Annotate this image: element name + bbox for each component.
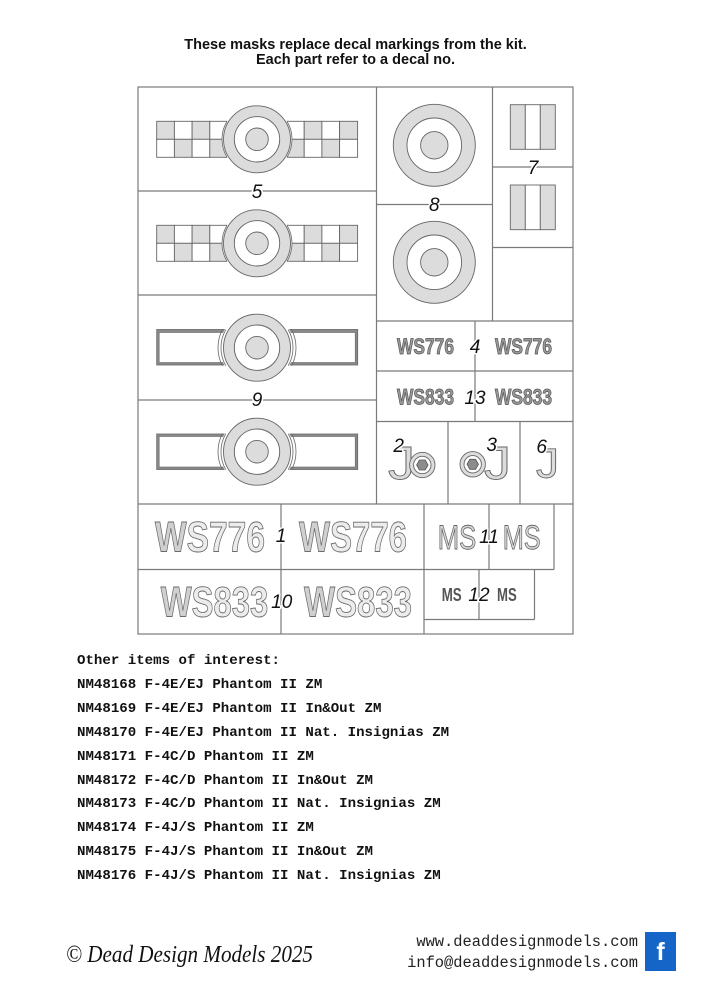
- handwritten part numbers: 9: [252, 390, 263, 411]
- large serials WS833: WS833: [161, 578, 268, 626]
- tail letter J with hex roundel: part 2: [388, 437, 435, 489]
- contact details: www.deaddesignmodels.com: [416, 933, 638, 951]
- tail letter J with hex roundel: part 3: [460, 437, 511, 489]
- large serials WS833: WS833: [304, 578, 412, 626]
- handwritten part numbers: 11: [479, 527, 499, 548]
- tail letter J with hex roundel: part 3: J: [484, 437, 511, 489]
- roundel with outlined bars: third: [157, 311, 358, 385]
- contact details: info@deaddesignmodels.com: [407, 954, 638, 972]
- text block: other items of interest: NM48175 F-4J/S Phantom II In&Out ZM: [77, 844, 373, 860]
- large code letters MS: MS: [438, 519, 476, 557]
- small serials WS833: WS833: [397, 384, 454, 410]
- handwritten part numbers: 12: [468, 585, 490, 606]
- text block: other items of interest: NM48171 F-4C/D Phantom II ZM: [77, 749, 314, 765]
- small serials WS776: WS776: [397, 334, 454, 359]
- handwritten part numbers: 1: [276, 526, 286, 547]
- handwritten part numbers: [252, 158, 547, 613]
- small code letters MS: MS: [442, 585, 462, 605]
- text block: other items of interest: NM48170 F-4E/EJ Phantom II Nat. Insignias ZM: [77, 725, 449, 741]
- heading: mask instructions: Each part refer to a decal no.: [256, 52, 455, 68]
- large code letters MS: MS: [503, 519, 541, 557]
- large serials WS776: [155, 514, 407, 562]
- large roundel: top: [393, 104, 475, 186]
- roundel with outlined bars: fourth: [157, 415, 358, 489]
- text block: other items of interest: NM48173 F-4C/D Phantom II Nat. Insignias ZM: [77, 796, 441, 812]
- handwritten part numbers: 13: [464, 388, 486, 409]
- large serials WS776: WS776: [299, 514, 407, 562]
- small code letters MS: [442, 585, 517, 605]
- handwritten part numbers: 2: [392, 436, 404, 457]
- text block: other items of interest: [77, 653, 449, 884]
- tricolour flash: top: [510, 105, 555, 149]
- tail letter J with hex roundel: part 2: J: [388, 437, 415, 489]
- handwritten part numbers: 4: [470, 337, 480, 358]
- roundel with checkerboard bars: top: [157, 104, 358, 174]
- panel: mask sheet grid: [138, 87, 573, 634]
- text block: other items of interest: NM48169 F-4E/EJ Phantom II In&Out ZM: [77, 701, 381, 717]
- large serials WS833: [161, 578, 412, 626]
- text block: other items of interest: NM48176 F-4J/S Phantom II Nat. Insignias ZM: [77, 868, 441, 884]
- text block: other items of interest: Other items of interest:: [77, 653, 280, 669]
- handwritten part numbers: 6: [536, 437, 547, 458]
- large serials WS776: WS776: [155, 514, 265, 562]
- copyright: © Dead Design Models 2025: [66, 942, 313, 968]
- roundel with checkerboard bars: second: [157, 208, 358, 278]
- heading: mask instructions: These masks replace decal markings from the kit.: [184, 37, 527, 53]
- contact details: [407, 933, 638, 972]
- tricolour flash: bottom: [510, 185, 555, 230]
- small serials WS833: WS833: [495, 384, 552, 410]
- text block: other items of interest: NM48172 F-4C/D Phantom II In&Out ZM: [77, 773, 373, 789]
- icon: facebook: [645, 932, 676, 971]
- small code letters MS: MS: [497, 585, 517, 605]
- large roundel: bottom: [393, 221, 475, 303]
- small serials WS776: WS776: [495, 334, 552, 359]
- handwritten part numbers: 10: [271, 592, 293, 613]
- small serials WS833: [397, 384, 552, 410]
- icon: facebook: f: [656, 938, 665, 966]
- small serials WS776: [397, 334, 552, 359]
- handwritten part numbers: 8: [429, 195, 440, 216]
- handwritten part numbers: 3: [486, 435, 497, 456]
- large code letters MS: [438, 519, 541, 557]
- handwritten part numbers: 5: [252, 182, 263, 203]
- handwritten part numbers: 7: [528, 158, 540, 179]
- heading: mask instructions: [184, 37, 527, 68]
- text block: other items of interest: NM48174 F-4J/S Phantom II ZM: [77, 820, 314, 836]
- text block: other items of interest: NM48168 F-4E/EJ Phantom II ZM: [77, 677, 322, 693]
- tail letter J: part 6: J: [536, 440, 559, 486]
